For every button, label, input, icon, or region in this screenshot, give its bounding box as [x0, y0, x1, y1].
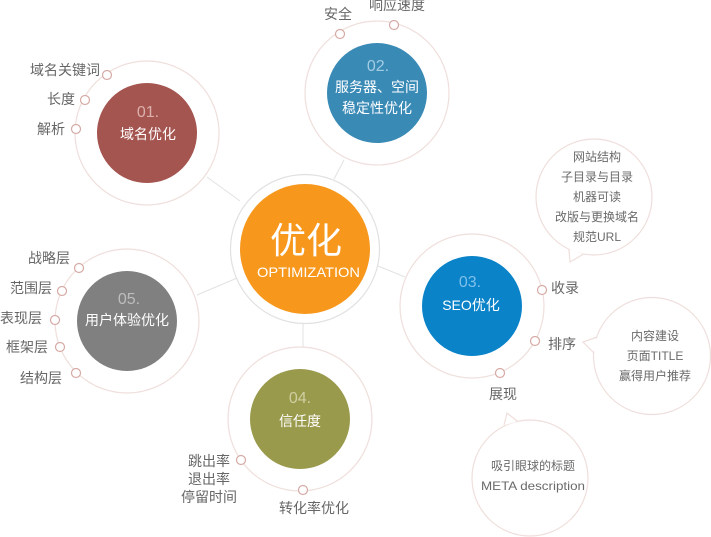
marker dots 04 [236, 456, 308, 494]
labels 05: 表现层 [0, 310, 42, 326]
callout: ranking factors: 页面TITLE [627, 349, 683, 363]
labels 03: 排序 [548, 336, 576, 352]
callout: ranking factors: 赢得用户推荐 [619, 368, 691, 383]
panel: 02 server stability [305, 0, 449, 165]
callout: ranking factors: 内容建设 [631, 328, 679, 343]
callout: site structure: 改版与更换域名 [555, 209, 639, 224]
topic title 03: SEO优化 [442, 297, 500, 313]
number 03: 03. [459, 274, 481, 291]
heading: centre title: 优化 [270, 220, 342, 261]
callout: site structure [536, 139, 652, 262]
number 01: 01. [137, 104, 159, 121]
number 04: 04. [289, 390, 311, 407]
topic title 02: 稳定性优化 [342, 100, 412, 116]
labels 03: 展现 [489, 386, 517, 402]
labels 02 [324, 0, 425, 22]
centre subtitle: OPTIMIZATION [257, 264, 360, 280]
labels 01 [30, 62, 100, 137]
labels 03: 收录 [551, 280, 579, 296]
callout: display factors: META description [481, 479, 585, 493]
topic title 01: 域名优化 [120, 126, 176, 142]
topic title 02 [335, 79, 419, 116]
panel: 03 SEO optimisation [400, 234, 579, 402]
labels 04: 退出率 [188, 471, 230, 487]
callout: display factors: 吸引眼球的标题 [491, 458, 575, 473]
labels 02: 安全 [324, 6, 352, 22]
labels 01: 解析 [37, 121, 65, 137]
connector lines from centre to topics [197, 160, 405, 347]
number 05: 05. [118, 291, 140, 308]
marker dots 01 [72, 70, 112, 134]
marker dots 03 [496, 286, 546, 378]
labels 05: 框架层 [6, 339, 48, 355]
marker dots 05 [50, 264, 84, 378]
topic title 02: 服务器、空间 [335, 79, 419, 95]
labels 01: 域名关键词 [30, 62, 100, 78]
labels 05: 结构层 [20, 370, 62, 386]
callout: display factors [472, 413, 588, 536]
labels 03 [489, 280, 579, 402]
topic title 05: 用户体验优化 [85, 312, 169, 328]
labels 05 [0, 250, 70, 386]
marker dots 02 [336, 20, 398, 38]
labels 01: 长度 [47, 91, 75, 107]
callout: site structure: 规范URL [573, 229, 621, 244]
callout: site structure: 机器可读 [573, 190, 621, 204]
panel: centre hub [230, 174, 380, 324]
panel: 04 trust [181, 347, 372, 516]
callout: ranking factors [583, 298, 710, 414]
callout: site structure: 子目录与目录 [561, 170, 633, 184]
labels 04: 跳出率 [188, 453, 230, 469]
labels 04: 转化率优化 [279, 500, 349, 516]
callout: site structure: 网站结构 [573, 149, 621, 164]
labels 04 [181, 453, 349, 516]
panel: 01 domain optimisation [30, 61, 219, 205]
number 02: 02. [367, 58, 389, 75]
labels 05: 范围层 [10, 280, 52, 296]
panel: 05 user experience [0, 249, 199, 393]
labels 05: 战略层 [28, 250, 70, 266]
labels 04: 停留时间 [181, 489, 237, 505]
topic title 04: 信任度 [279, 413, 321, 429]
